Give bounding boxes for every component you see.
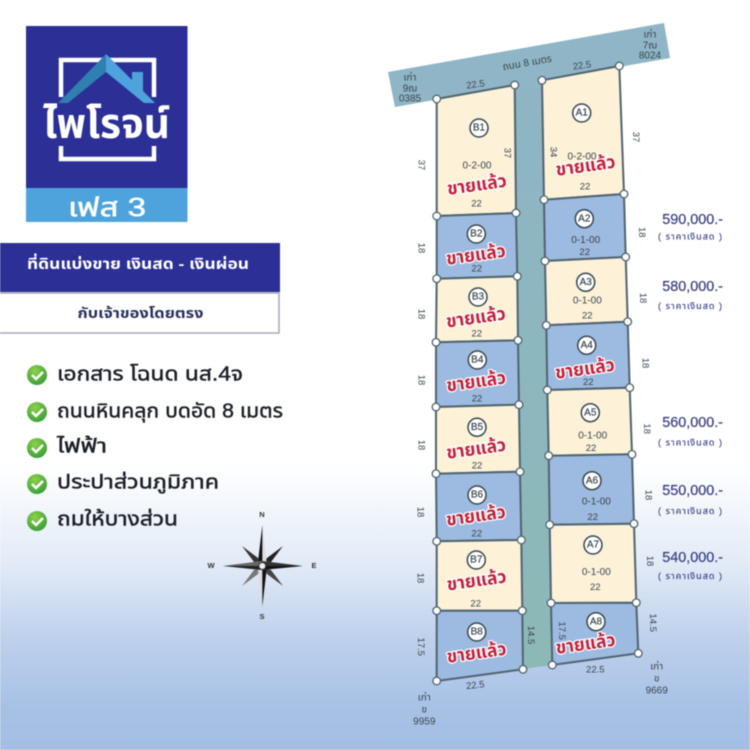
boundary labels bbox=[399, 28, 668, 728]
lot B8: 14.5 bbox=[525, 626, 536, 644]
subheader box bbox=[0, 293, 279, 333]
logo: ไพโรจน์ bbox=[43, 100, 170, 147]
lot B1: 37 bbox=[501, 148, 512, 158]
boundary labels: เก่า bbox=[418, 691, 431, 704]
lot B8: 17.5 bbox=[415, 637, 426, 656]
lot A8: ขายแล้ว bbox=[554, 630, 617, 658]
price: A7 bbox=[658, 550, 723, 581]
lot B1 bbox=[415, 78, 516, 216]
price: A3: ( ราคาเงินสด ) bbox=[658, 301, 722, 311]
lot A1: 22.5 bbox=[572, 59, 592, 73]
boundary labels: ข bbox=[654, 674, 659, 685]
logo bbox=[26, 26, 188, 222]
lot B3 bbox=[415, 276, 518, 342]
boundary labels: 0385 bbox=[399, 94, 422, 105]
lot A2: A2 bbox=[578, 213, 591, 224]
lot B5: 22 bbox=[472, 461, 482, 472]
lot B4 bbox=[415, 340, 519, 407]
boundary labels: 8024 bbox=[639, 51, 662, 62]
boundary labels: 9669 bbox=[646, 686, 668, 697]
lot B6: B6 bbox=[471, 490, 484, 501]
lot B1: 22.5 bbox=[466, 78, 485, 92]
boundary labels: เก่า bbox=[650, 660, 663, 673]
lot B1: 0-2-00 bbox=[463, 161, 492, 172]
lot B5 bbox=[415, 405, 520, 474]
item: fill bbox=[27, 507, 178, 531]
lot A6: A6 bbox=[586, 475, 599, 486]
lot B1: 22 bbox=[471, 199, 482, 210]
lot A4: A4 bbox=[581, 340, 593, 351]
price: A3 bbox=[658, 279, 723, 311]
lot B4: ขายแล้ว bbox=[445, 367, 507, 396]
lot B4: 22 bbox=[472, 394, 482, 405]
header banner: ที่ดินแบ่งขาย เงินสด - เงินผ่อน bbox=[27, 253, 249, 273]
lot B8: 22.5 bbox=[466, 679, 485, 692]
lot A5: 18 bbox=[641, 423, 652, 434]
lot B7: 18 bbox=[414, 573, 425, 583]
lot A8: 22.5 bbox=[586, 665, 605, 676]
lot A4: 18 bbox=[639, 358, 650, 368]
road bbox=[388, 23, 670, 669]
item: water: ประปาส่วนภูมิภาค bbox=[57, 470, 219, 494]
lot A8: 17.5 bbox=[556, 621, 567, 640]
lot A8: 14.5 bbox=[647, 613, 658, 632]
lot A6 bbox=[549, 454, 653, 525]
lot B4: 18 bbox=[415, 375, 426, 385]
item: electricity bbox=[27, 435, 107, 458]
lot B2: 18 bbox=[415, 243, 426, 253]
lot B2: B2 bbox=[470, 229, 483, 240]
price: A6 bbox=[658, 483, 723, 516]
lot B3: 22 bbox=[471, 329, 482, 340]
lot A3: 18 bbox=[637, 293, 648, 303]
compass rose bbox=[207, 510, 317, 621]
lot A5: A5 bbox=[584, 407, 597, 418]
price: A2: ( ราคาเงินสด ) bbox=[658, 231, 722, 241]
lot A4: 22 bbox=[583, 377, 594, 388]
item: title deed: เอกสาร โฉนด นส.4จ bbox=[57, 363, 243, 385]
subheader box: กับเจ้าของโดยตรง bbox=[78, 305, 204, 321]
lot A5 bbox=[547, 388, 652, 456]
lot A7: 0-1-00 bbox=[582, 567, 611, 578]
price: A5: 560,000.- bbox=[662, 415, 723, 431]
lot A8 bbox=[551, 603, 658, 676]
compass rose: W bbox=[207, 561, 215, 570]
lot B3: B3 bbox=[472, 292, 485, 303]
compass rose: S bbox=[259, 612, 265, 621]
lot B3: ขายแล้ว bbox=[445, 303, 507, 332]
lot A5: 22 bbox=[586, 443, 596, 454]
boundary labels: 9959 bbox=[413, 717, 436, 728]
lot B8 bbox=[415, 611, 536, 692]
lot A3: 0-1-00 bbox=[573, 295, 602, 306]
item: electricity: ไฟฟ้า bbox=[56, 435, 107, 457]
price: A7: ( ราคาเงินสด ) bbox=[658, 571, 722, 581]
lot A2: 18 bbox=[636, 227, 647, 238]
lot A4 bbox=[546, 322, 650, 390]
lot A1: ขายแล้ว bbox=[554, 152, 617, 180]
lot A2: 22 bbox=[579, 247, 590, 258]
logo: เฟส 3 bbox=[68, 192, 146, 222]
lot A3: 22 bbox=[582, 311, 593, 322]
lot B7: B7 bbox=[470, 555, 483, 566]
lot B2: 22 bbox=[471, 264, 482, 275]
lot B7: ขายแล้ว bbox=[445, 566, 508, 595]
lot B2 bbox=[415, 213, 517, 279]
lot A1: 0-2-00 bbox=[568, 152, 597, 163]
lot A2: 0-1-00 bbox=[571, 235, 601, 246]
lot B7 bbox=[414, 540, 522, 611]
lot B6 bbox=[414, 472, 521, 541]
road label: ถนน 8 เมตร bbox=[502, 54, 553, 73]
lot A7: A7 bbox=[587, 540, 600, 551]
lot B1: 37 bbox=[415, 160, 426, 170]
lot B5: 18 bbox=[415, 440, 426, 450]
item: fill: ถมให้บางส่วน bbox=[57, 507, 178, 530]
lot A7: 18 bbox=[644, 556, 655, 566]
boundary labels: เก่า bbox=[403, 71, 417, 84]
lot A1 bbox=[542, 59, 641, 200]
price: A5: ( ราคาเงินสด ) bbox=[658, 437, 722, 447]
compass rose: N bbox=[259, 510, 265, 519]
price: A6: 550,000.- bbox=[662, 483, 723, 499]
lot B1: B1 bbox=[473, 123, 486, 134]
boundary labels: 9ฌ bbox=[403, 84, 417, 95]
price: A3: 580,000.- bbox=[662, 279, 723, 295]
lot A8: A8 bbox=[590, 616, 603, 627]
lot B8: ขายแล้ว bbox=[445, 639, 508, 667]
lot A1: 22 bbox=[580, 182, 590, 193]
lot A4: ขายแล้ว bbox=[554, 355, 616, 383]
lot B6: ขายแล้ว bbox=[445, 502, 507, 530]
lot A5: 0-1-00 bbox=[578, 430, 608, 441]
compass rose: E bbox=[311, 561, 317, 570]
lot A6: 18 bbox=[642, 490, 653, 500]
lot A6: 22 bbox=[587, 512, 598, 523]
lot A3 bbox=[545, 257, 648, 325]
price: A2 bbox=[658, 212, 723, 241]
lot A7: 22 bbox=[590, 582, 601, 593]
price: A7: 540,000.- bbox=[662, 550, 723, 566]
lot B1: ขายแล้ว bbox=[446, 171, 508, 199]
lot B4: B4 bbox=[471, 355, 484, 366]
boundary labels: 7ฌ bbox=[643, 41, 657, 52]
lot B5: ขายแล้ว bbox=[445, 435, 507, 463]
lot B7: 22 bbox=[470, 599, 481, 610]
price: A2: 590,000.- bbox=[662, 212, 723, 228]
item: water bbox=[27, 470, 219, 494]
feature list bbox=[27, 363, 283, 531]
item: road: ถนนหินคลุก บดอัด 8 เมตร bbox=[57, 400, 283, 422]
lot A3: A3 bbox=[580, 277, 592, 288]
lot A7 bbox=[550, 524, 655, 603]
lot A2 bbox=[544, 194, 647, 261]
lot B6: 22 bbox=[471, 529, 482, 540]
lot B3: 18 bbox=[415, 309, 426, 319]
boundary labels: ข bbox=[422, 705, 427, 716]
boundary labels: เก่า bbox=[643, 28, 657, 41]
lot A1: A1 bbox=[576, 108, 588, 119]
price: A5 bbox=[658, 415, 723, 447]
price: A6: ( ราคาเงินสด ) bbox=[658, 506, 722, 516]
lot A1: 37 bbox=[630, 132, 641, 142]
boundary markers bbox=[432, 62, 642, 685]
lot A1: 34 bbox=[547, 147, 558, 157]
lot A6: 0-1-00 bbox=[582, 497, 611, 508]
lot B8: B8 bbox=[471, 627, 483, 638]
lot B2: ขายแล้ว bbox=[445, 241, 507, 269]
lot B5: B5 bbox=[471, 422, 484, 433]
lot B6: 18 bbox=[414, 507, 425, 517]
header banner bbox=[0, 243, 280, 292]
